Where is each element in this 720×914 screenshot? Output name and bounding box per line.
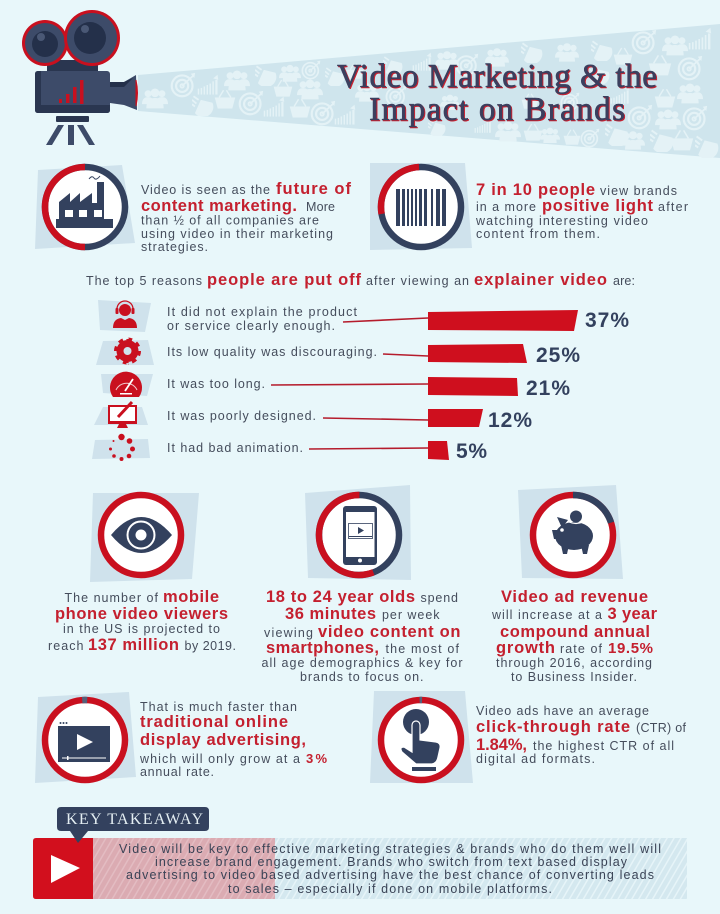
text: mobile phone video viewers: phone video viewers (55, 605, 228, 623)
text: 18 to 24 year olds: smartphones, (266, 639, 379, 657)
text: 7 in 10 people: after (658, 200, 688, 214)
text: mobile phone video viewers: The number of (64, 591, 159, 605)
title: Video Marketing & the (337, 58, 657, 95)
text: mobile phone video viewers (48, 588, 236, 654)
text: video ad revenue: 3 year (608, 605, 658, 623)
text: 7 in 10 people: positive light (542, 197, 654, 215)
text: 18 to 24 year olds: 36 minutes (285, 605, 376, 623)
badge: key takeaway: KEY TAKEAWAY (66, 811, 203, 828)
icon: video player (35, 692, 136, 783)
bar chart: reasons people are put off (92, 300, 629, 463)
text: 7 in 10 people: watching interesting video (475, 214, 648, 228)
panel: mobile phone video viewers (48, 493, 236, 654)
row: too long 21%: 21% (526, 377, 570, 400)
text: video ad revenue: compound annual (500, 623, 650, 641)
text: mobile phone video viewers: by 2019. (184, 639, 236, 653)
panel: traditional online display advertising (35, 692, 327, 783)
icon: film camera (22, 10, 138, 145)
text: takeaway message: increase brand engagement. Brands who switch from text based display (155, 855, 628, 869)
text: future of content marketing: More (306, 200, 335, 214)
text: 7 in 10 people: view brands (600, 184, 677, 198)
icon: barcode (370, 161, 472, 253)
icon: support agent (98, 300, 151, 332)
panel: video ad revenue (491, 485, 658, 684)
icon: gear (96, 339, 154, 365)
text: click-through rate: (CTR) of (636, 721, 687, 735)
row: did not explain 37% (98, 300, 629, 333)
text: traditional online display advertising: traditional online (140, 713, 288, 731)
text: traditional online display advertising: display advertising, (140, 731, 306, 749)
row: did not explain 37%: 37% (585, 309, 629, 332)
text: 7 in 10 people: 7 in 10 people (476, 181, 595, 199)
text: 18 to 24 year olds: viewing (264, 626, 313, 640)
icon: factory (35, 165, 135, 249)
row: did not explain 37%: It did not explain the product (167, 305, 358, 319)
text: 7 in 10 people: content from them. (476, 227, 600, 241)
text: video ad revenue (491, 588, 658, 684)
text: future of content marketing: future of (276, 180, 352, 198)
icon: play button (33, 838, 93, 899)
row: low quality 25% (96, 339, 580, 367)
row: poorly designed 12% (94, 402, 532, 432)
text: click-through rate (476, 704, 687, 766)
heading: top 5 reasons: are: (613, 274, 635, 288)
title (337, 58, 657, 128)
text: 18 to 24 year olds: spend (420, 591, 458, 605)
heading: top 5 reasons: people are put off (207, 271, 362, 289)
icon: eye (90, 493, 199, 582)
panel: 7 in 10 people (370, 161, 688, 253)
text: mobile phone video viewers: 137 million (88, 636, 179, 654)
title: Impact on Brands (369, 91, 625, 128)
text: future of content marketing: using video in their marketing (141, 227, 333, 241)
text: traditional online display advertising: which will only grow at a (139, 752, 300, 766)
text: click-through rate: Video ads have an average (476, 704, 649, 718)
text: mobile phone video viewers: in the US is projected to (63, 622, 220, 636)
text: video ad revenue: to Business Insider. (511, 670, 637, 684)
text: takeaway message: to sales – especially if done on mobile platforms. (228, 882, 552, 896)
panel: key takeaway (33, 807, 687, 899)
heading: top 5 reasons: The top 5 reasons (86, 274, 202, 288)
panel: future of content marketing (35, 165, 352, 254)
row: did not explain 37%: or service clearly enough. (167, 319, 335, 333)
row: bad animation 5%: 5% (456, 440, 487, 463)
text: click-through rate: the highest CTR of all (533, 739, 674, 753)
text: 18 to 24 year olds (262, 588, 462, 684)
row: bad animation 5%: It had bad animation. (167, 441, 303, 455)
text: 18 to 24 year olds: per week (382, 608, 440, 622)
text: 18 to 24 year olds: video content on (318, 623, 460, 641)
text: video ad revenue: growth (496, 639, 555, 657)
text: future of content marketing (141, 180, 352, 254)
icon: speedometer (101, 372, 153, 397)
text: video ad revenue: 19.5% (608, 640, 653, 657)
panel: 18 to 24 year olds (262, 483, 462, 684)
row: too long 21% (101, 372, 570, 400)
icon: piggy bank (518, 485, 623, 579)
row: bad animation 5% (92, 434, 487, 463)
text: traditional online display advertising: 3% (306, 751, 327, 766)
text: video ad revenue: Video ad revenue (501, 588, 648, 606)
text: video ad revenue: rate of (560, 642, 603, 656)
text: 7 in 10 people: in a more (476, 200, 536, 214)
text: traditional online display advertising: That is much faster than (140, 700, 297, 714)
row: low quality 25%: 25% (536, 344, 580, 367)
text: future of content marketing: content marketing. (141, 197, 297, 215)
icon: finger tapping (370, 691, 473, 783)
text: click-through rate: click-through rate (476, 718, 630, 736)
text: click-through rate: 1.84%, (476, 736, 527, 754)
heading: top 5 reasons: after viewing an (366, 274, 469, 288)
icon: monitor with pencil (94, 402, 148, 428)
text: video ad revenue: will increase at a (491, 608, 602, 622)
text: future of content marketing: than ½ of all companies are (141, 214, 319, 228)
projector beam with marketing icons (138, 24, 720, 159)
text: future of content marketing: strategies. (141, 240, 208, 254)
text: 18 to 24 year olds: the most of (386, 642, 460, 656)
text: mobile phone video viewers: reach (48, 639, 84, 653)
text: takeaway message (119, 842, 661, 896)
text: video ad revenue: through 2016, according (496, 656, 652, 670)
text: 18 to 24 year olds: all age demographics & key for (262, 656, 462, 670)
text: takeaway message: advertising to video based advertising have the best chance of converting leads (126, 868, 654, 882)
text: future of content marketing: Video is seen as the (141, 183, 270, 197)
text: takeaway message: Video will be key to effective marketing strategies & brands who do them well will (119, 842, 661, 856)
row: low quality 25%: Its low quality was discouraging. (167, 345, 377, 359)
heading: top 5 reasons: explainer video (474, 271, 607, 289)
badge: key takeaway (57, 807, 209, 843)
text: mobile phone video viewers: mobile (163, 588, 219, 606)
text: click-through rate: digital ad formats. (476, 752, 595, 766)
text: 7 in 10 people (475, 181, 688, 241)
row: too long 21%: It was too long. (167, 377, 265, 391)
striped text band (93, 838, 687, 899)
row: poorly designed 12%: It was poorly designed. (167, 409, 316, 423)
text: 18 to 24 year olds: brands to focus on. (300, 670, 424, 684)
icon: loading dots (92, 434, 150, 461)
icon: smartphone with video (305, 483, 411, 587)
panel: click-through rate (370, 691, 687, 783)
text: 18 to 24 year olds: 18 to 24 year olds (266, 588, 415, 606)
heading: top 5 reasons (86, 271, 635, 289)
text: traditional online display advertising: annual rate. (140, 765, 214, 779)
text: traditional online display advertising (139, 700, 327, 779)
row: poorly designed 12%: 12% (488, 409, 532, 432)
